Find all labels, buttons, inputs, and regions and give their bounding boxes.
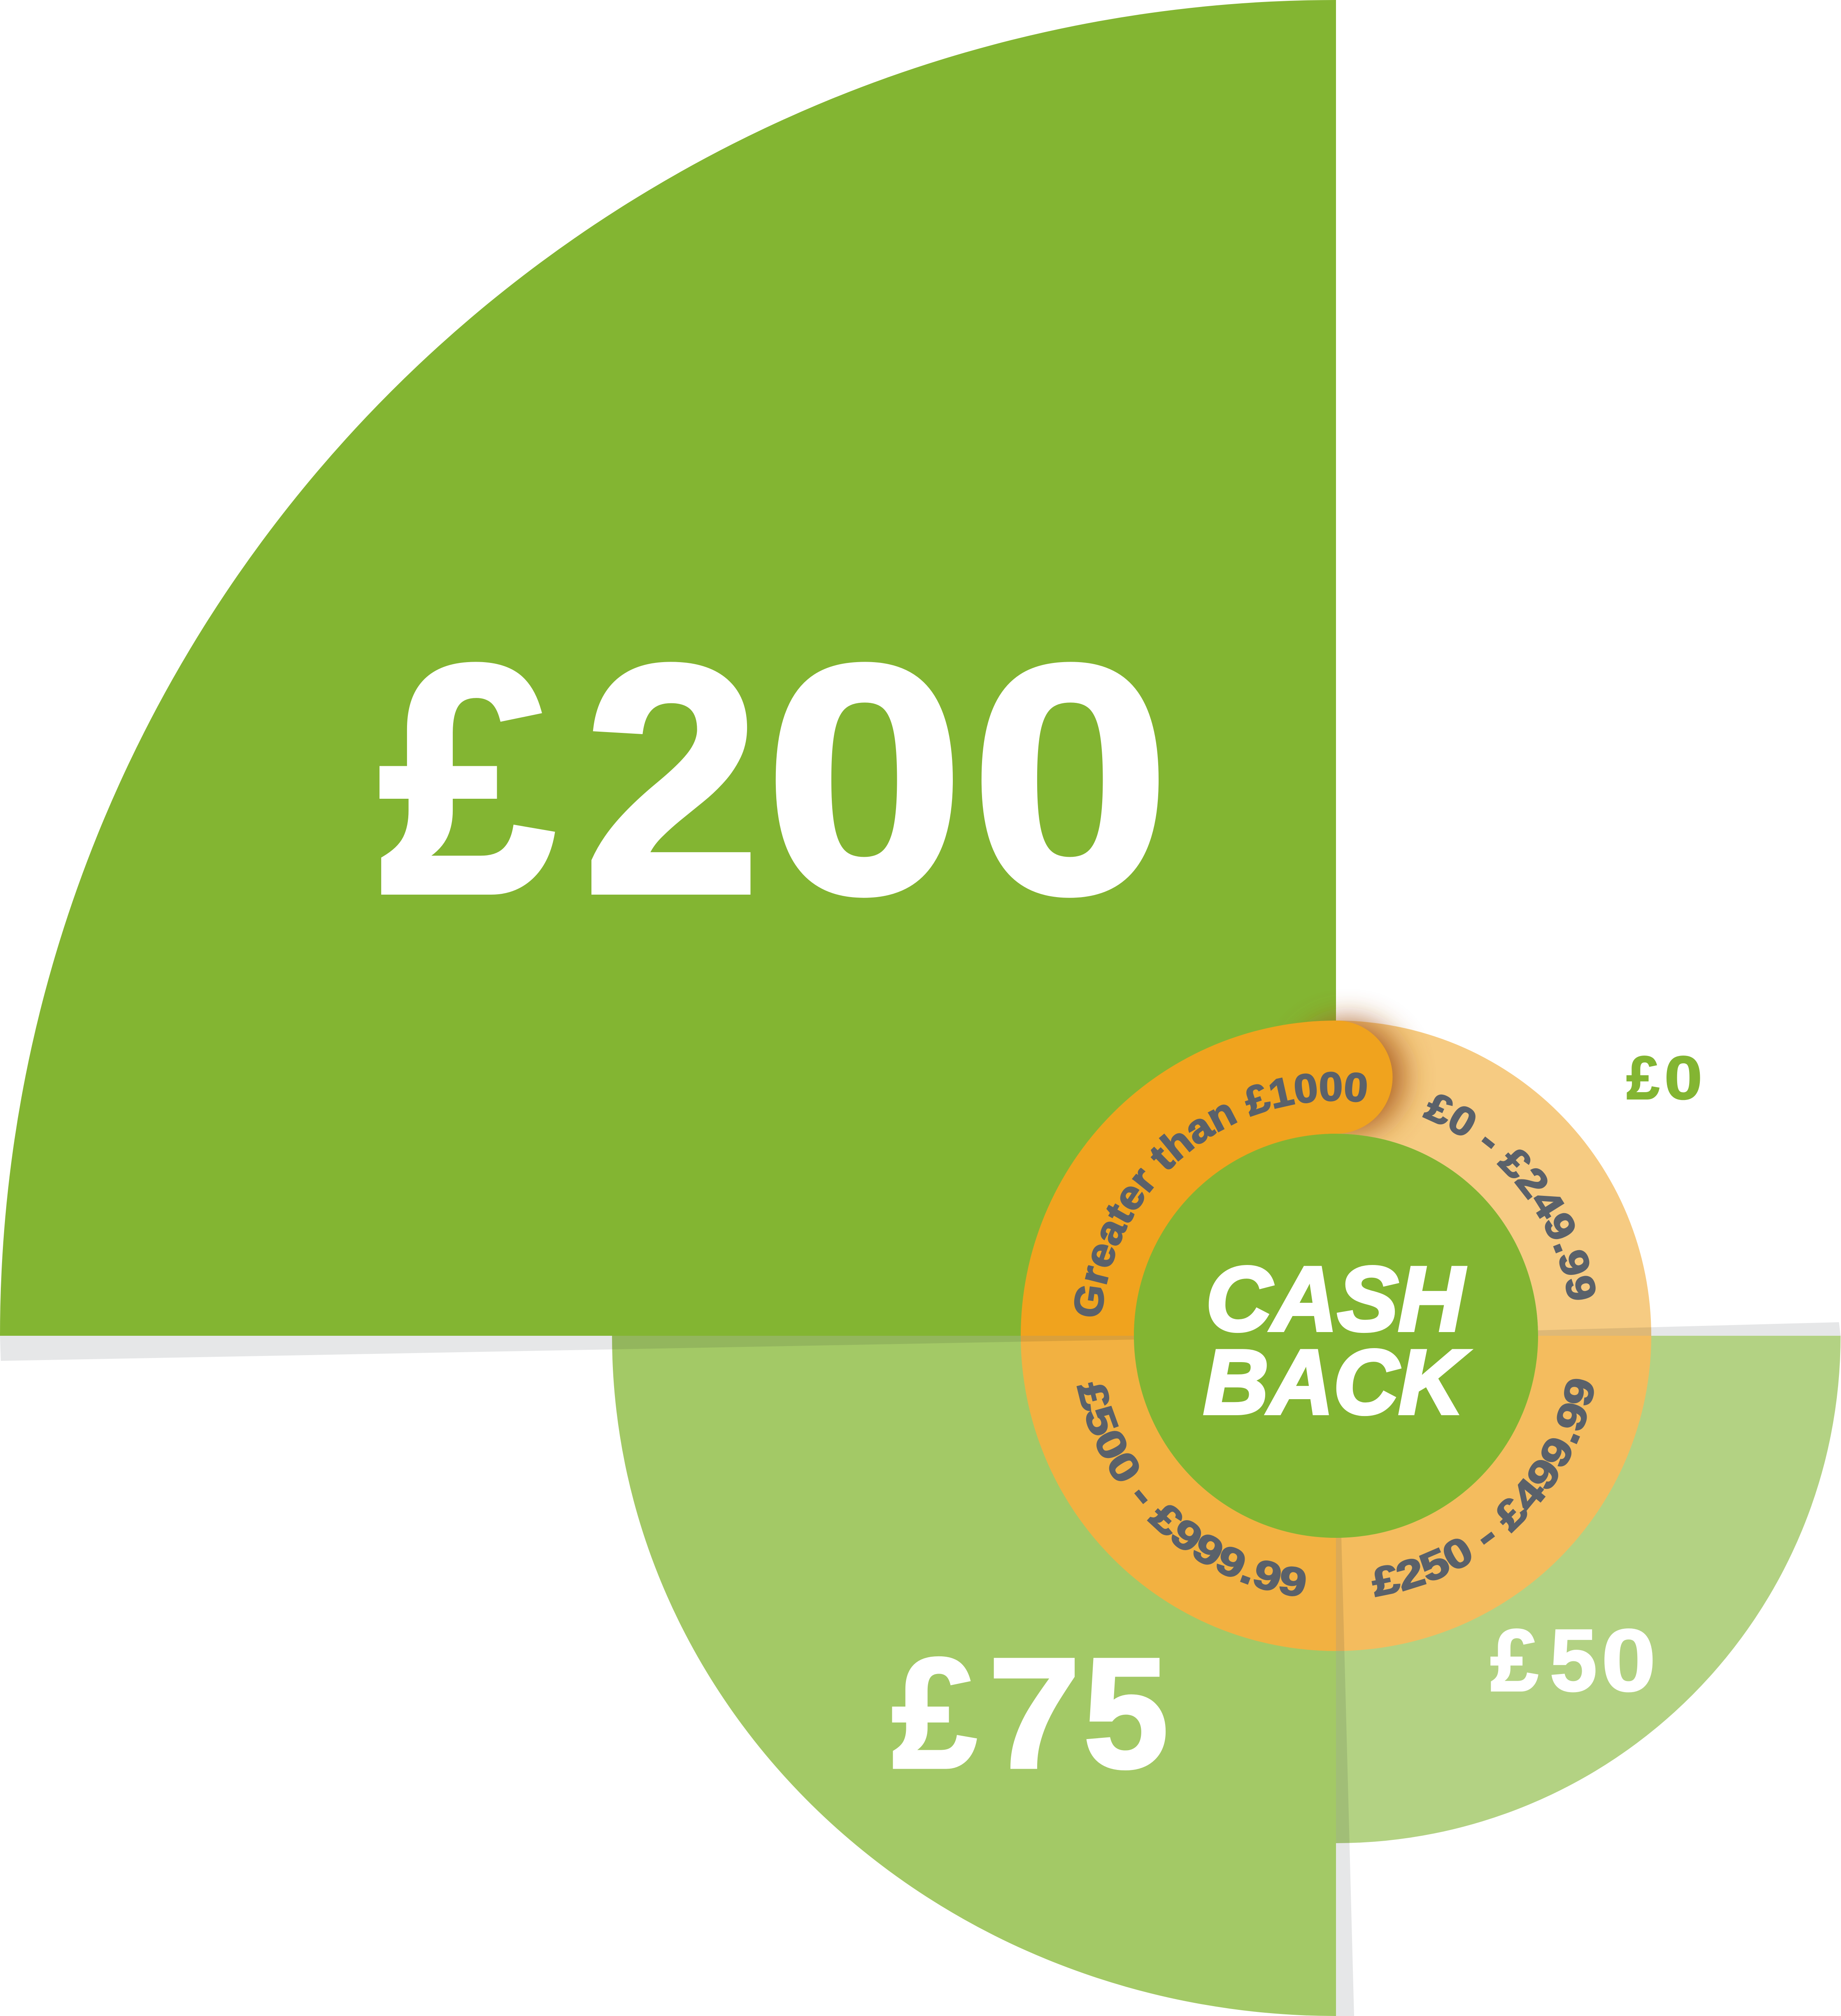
value: £0: £: [1627, 1044, 1659, 1112]
heading: cash back: BACK: [1203, 1331, 1469, 1433]
ring segment: £0 – £249.99 band: [1336, 1021, 1651, 1336]
value: £50: [1490, 1611, 1656, 1709]
heading: cash back: [1203, 1248, 1469, 1433]
ring label: greater than £1000: Greater than £1000: [1064, 1064, 1370, 1321]
value: £200: 0: [765, 598, 964, 961]
value: £200: 2: [583, 598, 761, 961]
value: £75: 7: [988, 1626, 1080, 1801]
value: £75: £: [892, 1625, 977, 1801]
value: £200: £: [379, 598, 555, 961]
value: £0: 0: [1664, 1044, 1702, 1112]
heading: cash back: CASH: [1206, 1248, 1466, 1350]
value: £50: 0: [1601, 1611, 1656, 1709]
ring segment: £500 – £999.99 band: [1021, 1336, 1336, 1651]
ring label: £0 – £249.99: £0 - £249.99: [1419, 1083, 1606, 1304]
value: £50: £: [1490, 1611, 1538, 1709]
ring tab shadow: [1291, 1020, 1405, 1134]
value: £75: 5: [1083, 1625, 1168, 1801]
value: £200: 0: [971, 598, 1170, 961]
value: £200: [379, 598, 1170, 961]
ring label: £500 – £999.99: £500 - £999.99: [1069, 1377, 1310, 1606]
shadow wedge: left: [0, 1336, 1336, 1361]
shadow wedge: bottom: [1336, 1336, 1354, 2016]
value: £50: 5: [1550, 1611, 1597, 1709]
shadow wedge: right: [1336, 1322, 1841, 1336]
segment: £75 quarter: [612, 1336, 1336, 2016]
segment: £200 quarter: [0, 0, 1336, 1336]
ring segment: greater than £1000 tab: [1021, 1021, 1393, 1336]
centre circle: [1134, 1134, 1538, 1538]
value: £75: [892, 1625, 1168, 1801]
ring label: £250 – £499.99: £250 - £499.99: [1368, 1374, 1604, 1605]
ring segment: £250 – £499.99 band: [1336, 1336, 1651, 1651]
segment: £50 quarter: [1336, 1336, 1841, 1843]
value: £0: [1627, 1044, 1702, 1112]
